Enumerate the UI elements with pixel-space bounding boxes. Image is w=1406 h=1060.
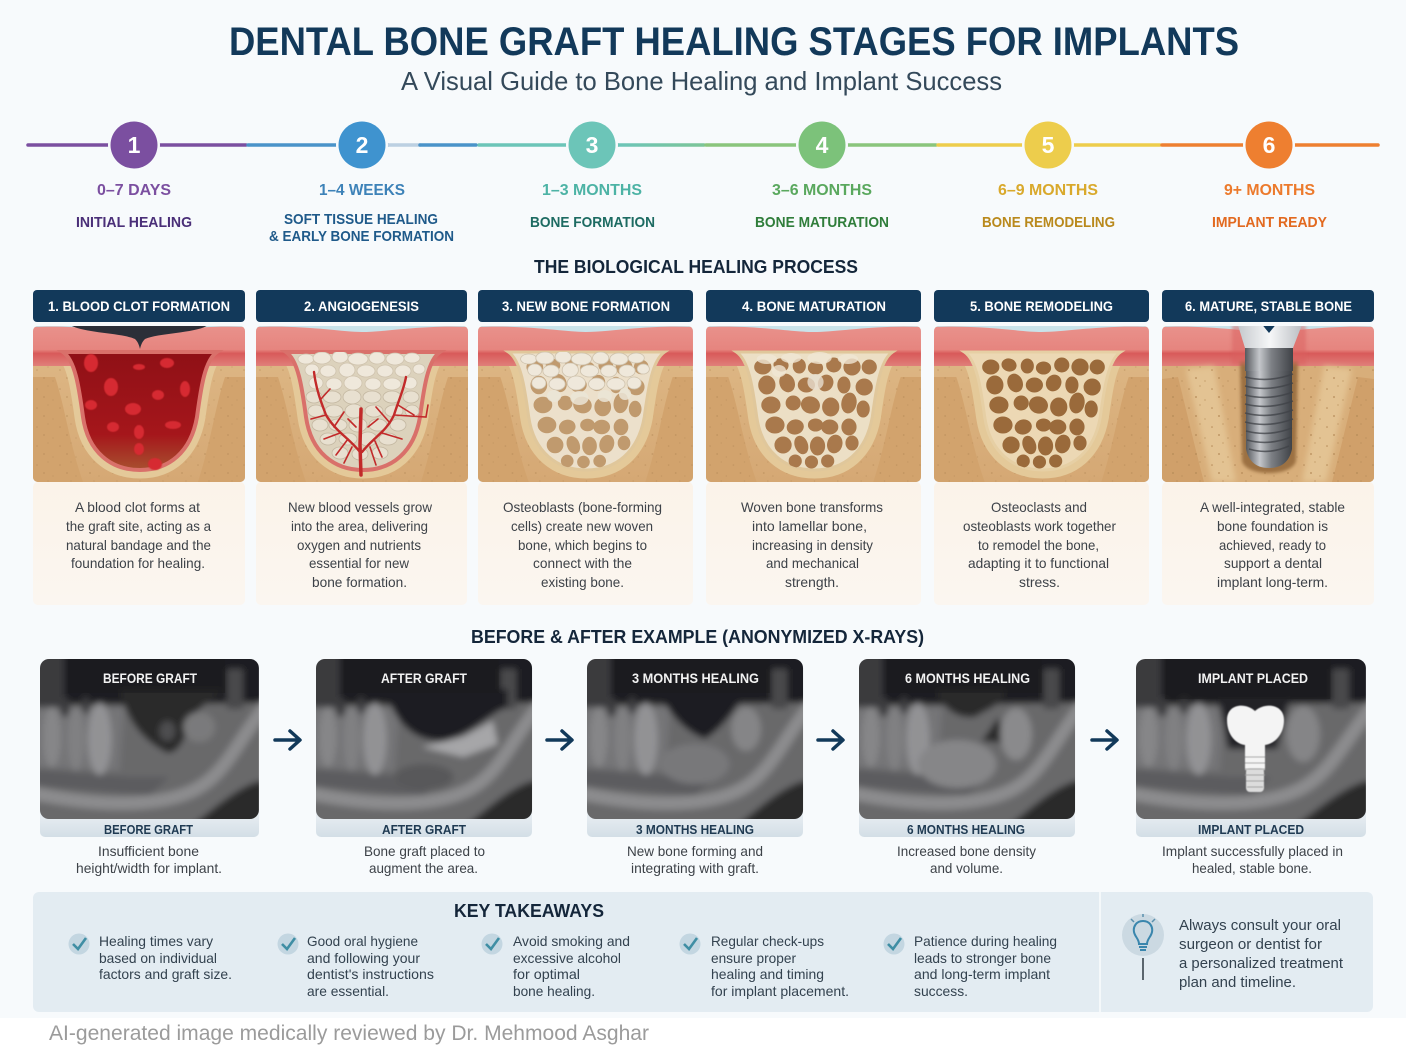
x-ray: after graft [308,651,540,876]
description: oxygen and nutrients [297,537,421,553]
takeaway 4: for implant placement. [711,983,849,999]
stage 2 marker: 2 [356,132,368,158]
takeaway 1: based on individual [99,950,217,966]
takeaway 1: Healing times vary [99,933,213,949]
x-ray: 6 months healing: 6 MONTHS HEALING [905,671,1030,686]
timeline labels: BONE MATURATION [755,214,889,231]
description: stress. [1019,574,1060,590]
description: bone, which begins to [518,537,647,553]
arrow [1092,731,1117,749]
takeaway 3: excessive alcohol [513,950,621,966]
takeaway 5: success. [914,983,968,999]
x-ray: 3 months healing [579,651,811,876]
description: New blood vessels grow [288,499,433,515]
advice text: plan and timeline. [1179,974,1296,991]
description [1200,499,1345,590]
description [503,499,662,590]
header [33,290,245,322]
x-ray: after graft: AFTER GRAFT [381,671,468,686]
stage 4 marker: 4 [816,132,829,158]
description: A well-integrated, stable [1200,499,1345,515]
description: into the area, delivering [291,518,428,534]
takeaway 5 [884,933,1057,999]
x-ray image [1136,659,1366,819]
heading: before and after: BEFORE & AFTER EXAMPLE (ANONYMIZED X-RAYS) [471,627,924,647]
takeaway 2: dentist's instructions [307,966,434,982]
caption [1162,843,1343,876]
stage 1 marker [108,119,160,171]
illustration: lamellar bone [706,325,921,482]
stage 5 marker [1022,119,1074,171]
header: 2. ANGIOGENESIS [304,298,419,314]
description: Osteoblasts (bone-forming [503,499,662,515]
description [288,499,433,590]
timeline labels: 3–6 MONTHS [772,182,872,199]
arrow [818,731,843,749]
panel: mature stable bone [1162,290,1374,605]
takeaway 5: and long-term implant [914,966,1050,982]
header [706,290,921,322]
title: DENTAL BONE GRAFT HEALING STAGES FOR IMPLANTS [229,20,1239,64]
description: increasing in density [752,537,873,553]
header: 1. BLOOD CLOT FORMATION [48,298,230,314]
x-ray: implant placed: IMPLANT PLACED [1198,823,1304,837]
x-ray: 6 months healing [859,659,1076,873]
x-ray image [316,659,532,819]
header: 3. NEW BONE FORMATION [502,298,670,314]
advice text: surgeon or dentist for [1179,936,1322,953]
takeaway 4 [680,933,849,999]
x-ray: after graft: AFTER GRAFT [382,823,466,837]
illustration: blood clot [33,325,245,482]
description: Osteoclasts and [991,499,1087,515]
description: natural bandage and the [66,537,211,553]
description: achieved, ready to [1219,537,1326,553]
description: implant long-term. [1217,574,1328,590]
takeaway 5: leads to stronger bone [914,950,1051,966]
description [66,499,211,571]
description [741,499,883,590]
timeline labels: INITIAL HEALING [76,214,192,231]
x-ray: 3 months healing: 3 MONTHS HEALING [636,823,754,837]
stage 6 marker [1243,119,1295,171]
advice text: a personalized treatment [1179,955,1344,972]
stage 2 marker [336,119,388,171]
caption: and volume. [930,860,1003,876]
x-ray: before graft: BEFORE GRAFT [104,823,193,837]
timeline labels: BONE FORMATION [530,214,655,231]
header: 4. BONE MATURATION [742,298,886,314]
heading: biological healing process: THE BIOLOGICAL HEALING PROCESS [534,257,858,277]
footer credit: AI-generated image medically reviewed by Dr. Mehmood Asghar [49,1022,649,1045]
caption: Implant successfully placed in [1162,843,1343,859]
description: the graft site, acting as a [66,518,211,534]
caption: height/width for implant. [76,860,222,876]
caption: augment the area. [369,860,478,876]
timeline labels: & EARLY BONE FORMATION [269,228,454,245]
stage 6 marker: 6 [1263,132,1275,158]
timeline labels: 9+ MONTHS [1224,182,1315,199]
implant on x-ray [1227,706,1284,792]
x-ray image [587,659,804,819]
takeaway 4: healing and timing [711,966,824,982]
timeline labels: 0–7 DAYS [97,182,171,199]
x-ray: 3 months healing: 3 MONTHS HEALING [632,671,759,686]
description: to remodel the bone, [978,537,1099,553]
description: essential for new [309,555,410,571]
stage 4 marker [796,119,848,171]
panel: key takeaways [33,892,1373,1012]
description: connect with the [533,555,632,571]
illustration: dental implant in bone [1162,322,1374,482]
takeaway 1: factors and graft size. [99,966,232,982]
description: cells) create new woven [511,518,653,534]
description: support a dental [1224,555,1322,571]
panel: blood clot formation [33,290,245,605]
timeline labels: 6–9 MONTHS [998,182,1098,199]
takeaway 2: are essential. [307,983,389,999]
arrow [547,731,572,749]
illustration: remodeled bone [934,325,1149,482]
takeaway 4: Regular check-ups [711,933,824,949]
description: adapting it to functional [968,555,1109,571]
takeaway 3: Avoid smoking and [513,933,630,949]
header: 6. MATURE, STABLE BONE [1185,298,1352,314]
panel: new bone formation [478,290,693,605]
caption [364,843,485,876]
illustration: new blood vessels [256,325,468,482]
takeaway 2 [278,933,434,999]
x-ray: before graft: BEFORE GRAFT [103,671,198,686]
arrow [275,731,300,749]
heading: KEY TAKEAWAYS [454,901,604,921]
takeaway 3: for optimal [513,966,580,982]
description: A blood clot forms at [75,499,200,515]
description: existing bone. [541,574,624,590]
x-ray: implant placed: IMPLANT PLACED [1198,671,1308,686]
header [256,290,467,322]
panel: bone remodeling [934,290,1149,605]
x-ray image [859,659,1076,819]
description [963,499,1116,590]
description: foundation for healing. [71,555,205,571]
timeline labels [76,182,1327,245]
takeaway 1 [68,933,232,982]
header [934,290,1149,322]
timeline [28,119,1378,171]
description: strength. [785,574,839,590]
panel: bone maturation [706,290,921,605]
description: Woven bone transforms [741,499,883,515]
caption: integrating with graft. [631,860,759,876]
x-ray: implant placed [1136,659,1366,875]
takeaway 3: bone healing. [513,983,595,999]
timeline labels: 1–3 MONTHS [542,182,642,199]
timeline labels: IMPLANT READY [1212,214,1327,231]
caption: Insufficient bone [98,843,199,859]
icon: light bulb [1122,914,1164,980]
takeaway 5: Patience during healing [914,933,1057,949]
caption: New bone forming and [627,843,763,859]
timeline labels: 1–4 WEEKS [319,182,405,199]
caption: Increased bone density [897,843,1036,859]
stage 1 marker: 1 [128,132,141,158]
description: bone foundation is [1217,518,1328,534]
takeaway 3 [482,933,630,999]
x-ray image [40,659,259,819]
description: osteoblasts work together [963,518,1116,534]
description: into lamellar bone, [752,518,867,534]
description: bone formation. [312,574,407,590]
illustration: woven bone [478,325,693,482]
subtitle: A Visual Guide to Bone Healing and Implant Success [401,66,1002,96]
stage 5 marker: 5 [1042,132,1055,158]
stage 3 marker: 3 [586,132,598,158]
header: 5. BONE REMODELING [970,298,1113,314]
takeaway 4: ensure proper [711,950,796,966]
caption: healed, stable bone. [1192,860,1312,876]
caption: Bone graft placed to [364,843,485,859]
caption [897,843,1036,876]
takeaway 2: and following your [307,950,420,966]
advice text: Always consult your oral [1179,917,1341,934]
panel: angiogenesis [256,290,468,605]
timeline labels: SOFT TISSUE HEALING [284,211,438,228]
advice text [1179,917,1344,991]
header [1162,290,1374,322]
x-ray: before graft [40,659,259,876]
stage 3 marker [566,119,618,171]
header [478,290,693,322]
timeline labels: BONE REMODELING [982,214,1115,231]
caption [627,843,763,876]
x-ray: 6 months healing: 6 MONTHS HEALING [907,823,1025,837]
takeaway 2: Good oral hygiene [307,933,418,949]
description: and mechanical [766,555,859,571]
caption [76,843,222,876]
